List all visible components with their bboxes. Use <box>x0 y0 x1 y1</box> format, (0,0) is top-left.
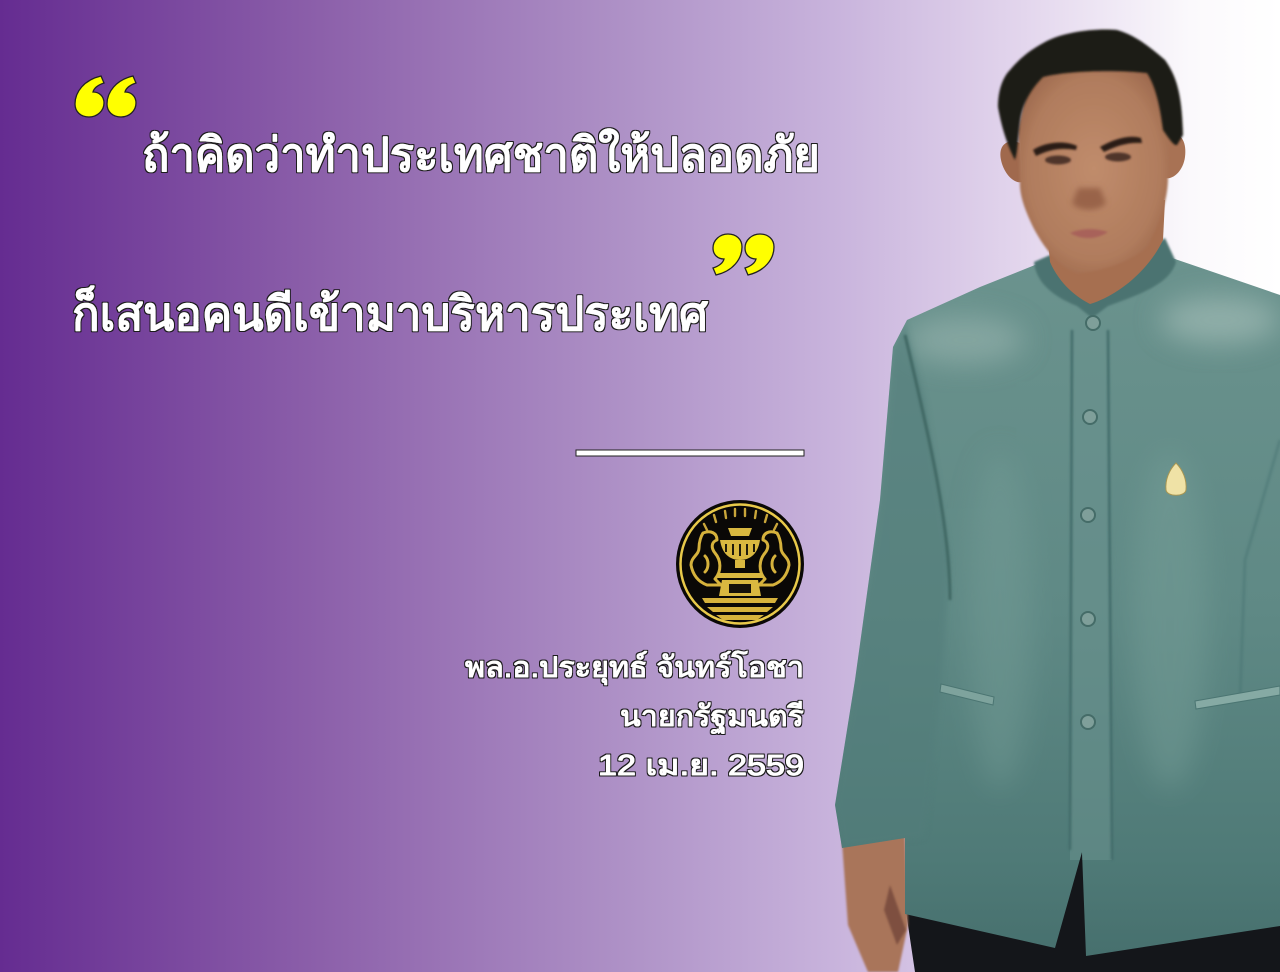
left sleeve <box>835 322 950 848</box>
quote line 2: ก็เสนอคนดีเข้ามาบริหารประเทศ <box>72 285 708 340</box>
divider under quote <box>576 450 804 456</box>
lapel pin <box>1166 463 1186 495</box>
hair <box>998 30 1183 160</box>
face <box>1018 64 1170 273</box>
collar <box>1034 238 1176 318</box>
quote line 1: ถ้าคิดว่าทำประเทศชาติให้ปลอดภัย <box>142 128 820 181</box>
hand <box>842 832 908 972</box>
eyes <box>1045 156 1071 164</box>
seal rays <box>704 509 777 530</box>
seal pedestal <box>716 573 764 596</box>
ears <box>1000 142 1022 182</box>
seal: office of the prime minister emblem <box>676 500 804 628</box>
seal urn <box>720 528 760 568</box>
portrait: man in teal jacket <box>830 30 1280 972</box>
right sleeve edge <box>1241 440 1280 654</box>
caption: date: 12 เม.ย. 2559 <box>598 750 804 782</box>
buttons <box>1081 316 1100 729</box>
closing quotation mark <box>713 234 774 275</box>
pockets <box>940 684 1280 709</box>
jacket <box>830 255 1280 965</box>
eyebrows <box>1033 137 1142 156</box>
seal lions <box>691 532 789 585</box>
neck <box>1048 200 1165 304</box>
mouth <box>1070 229 1108 238</box>
trousers <box>905 840 1280 972</box>
caption: name: พล.อ.ประยุทธ์ จันทร์โอชา <box>465 650 804 685</box>
opening quotation mark <box>75 76 136 117</box>
nose <box>1072 188 1106 210</box>
placket <box>1070 680 1111 860</box>
caption: position: นายกรัฐมนตรี <box>620 701 804 734</box>
